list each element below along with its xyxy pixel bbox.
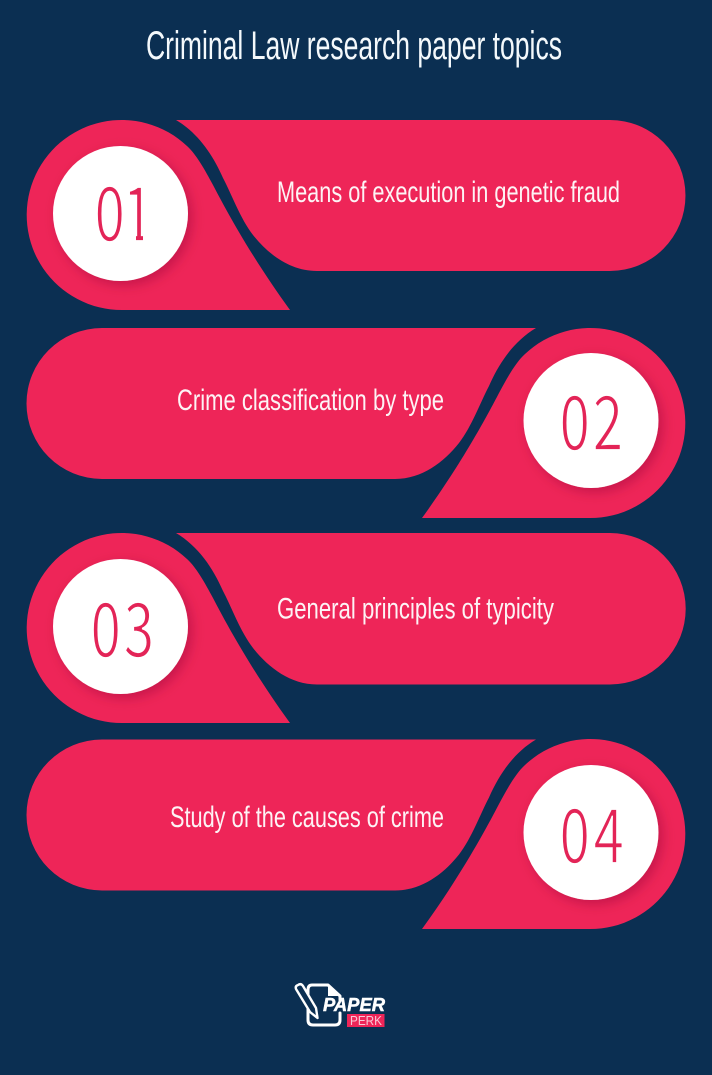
banner 02	[27, 328, 536, 479]
number badge 04	[524, 765, 658, 900]
teardrop 02	[422, 328, 685, 518]
banner 01	[176, 120, 685, 271]
teardrop 01	[27, 120, 290, 310]
icon: document	[308, 985, 340, 1025]
panel: topic 02	[27, 328, 685, 518]
badge: PERK	[347, 1014, 384, 1027]
teardrop 04	[422, 739, 685, 929]
wordmark: PAPER: PAPER	[323, 995, 385, 1015]
topic text 03: General principles of typicity	[277, 592, 554, 626]
panel: topic 03	[27, 533, 686, 723]
icon: pencil	[296, 984, 318, 1018]
number 03: 03	[90, 570, 154, 680]
panel: topic 01	[27, 120, 685, 310]
number badge 03	[53, 559, 188, 694]
panel: topic 04	[27, 739, 685, 929]
number badge 02	[524, 353, 658, 488]
topic text 02: Crime classification by type	[177, 384, 444, 417]
teardrop 03	[27, 533, 290, 723]
icon: document fold	[328, 985, 340, 996]
topic text 04: Study of the causes of crime	[170, 801, 444, 834]
number 01: 01	[94, 154, 153, 264]
logo: Paper Perk	[296, 984, 385, 1028]
number 04: 04	[560, 776, 624, 886]
number badge 01	[53, 146, 188, 281]
wordmark: PERK: PERK	[350, 1014, 383, 1028]
banner 04	[27, 740, 536, 890]
number 02: 02	[560, 363, 623, 473]
banner 03	[176, 533, 686, 684]
